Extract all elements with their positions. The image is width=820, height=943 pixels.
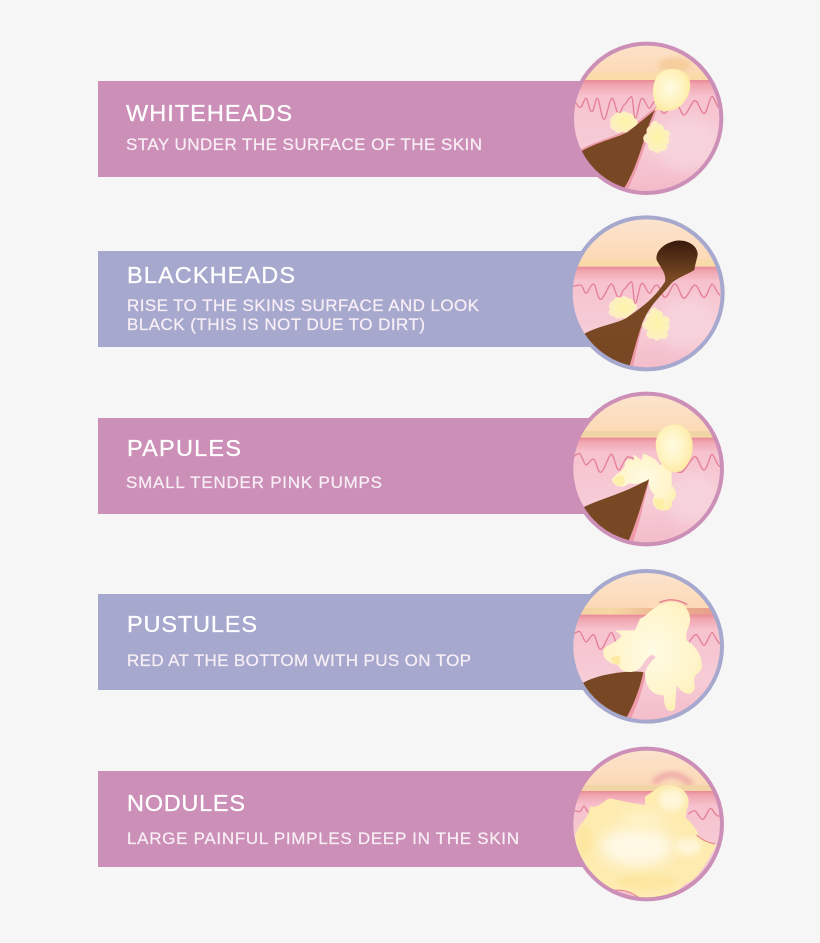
icon: pustule skin cross-section xyxy=(573,569,724,724)
description: LARGE PAINFUL PIMPLES DEEP IN THE SKIN xyxy=(127,829,519,848)
description: RED AT THE BOTTOM WITH PUS ON TOP xyxy=(127,651,471,670)
panel: pustules xyxy=(98,562,730,729)
icon: nodule skin cross-section xyxy=(573,746,724,902)
nodule mass xyxy=(575,785,717,899)
infographic: types of acne xyxy=(98,42,725,902)
description: STAY UNDER THE SURFACE OF THE SKIN xyxy=(126,135,482,154)
follicle xyxy=(580,672,643,719)
panel: blackheads xyxy=(98,210,730,377)
heading: PUSTULES xyxy=(127,611,257,637)
light patches xyxy=(600,827,673,867)
heading: BLACKHEADS xyxy=(127,262,295,288)
whitehead xyxy=(653,69,690,111)
banner xyxy=(98,251,598,347)
follicle xyxy=(580,478,649,542)
clump left xyxy=(610,111,638,133)
clump right xyxy=(643,308,670,340)
description: RISE TO THE SKINS SURFACE AND LOOK xyxy=(127,296,480,315)
inflamed pus xyxy=(612,453,676,511)
clump right xyxy=(643,121,670,153)
icon: blackhead skin cross-section xyxy=(572,215,725,372)
description line 2: BLACK (THIS IS NOT DUE TO DIRT) xyxy=(127,315,425,334)
banner xyxy=(98,418,598,514)
banner xyxy=(98,771,598,867)
icon: whitehead skin cross-section xyxy=(574,42,724,195)
description: SMALL TENDER PINK PUMPS xyxy=(126,473,382,492)
pus xyxy=(603,602,702,711)
edge of mass xyxy=(613,835,715,897)
clump left xyxy=(609,296,637,319)
heading: PAPULES xyxy=(127,435,241,461)
papule head xyxy=(656,424,693,472)
red rim of pustule xyxy=(659,600,687,605)
panel: nodules xyxy=(98,740,730,908)
blackhead and follicle xyxy=(580,241,698,367)
panel: whiteheads xyxy=(98,30,730,196)
icon: papule skin cross-section xyxy=(573,392,724,546)
banner xyxy=(98,81,598,177)
panel: papules xyxy=(98,385,730,552)
heading: NODULES xyxy=(127,790,245,816)
heading: WHITEHEADS xyxy=(126,100,292,126)
banner xyxy=(98,594,598,690)
